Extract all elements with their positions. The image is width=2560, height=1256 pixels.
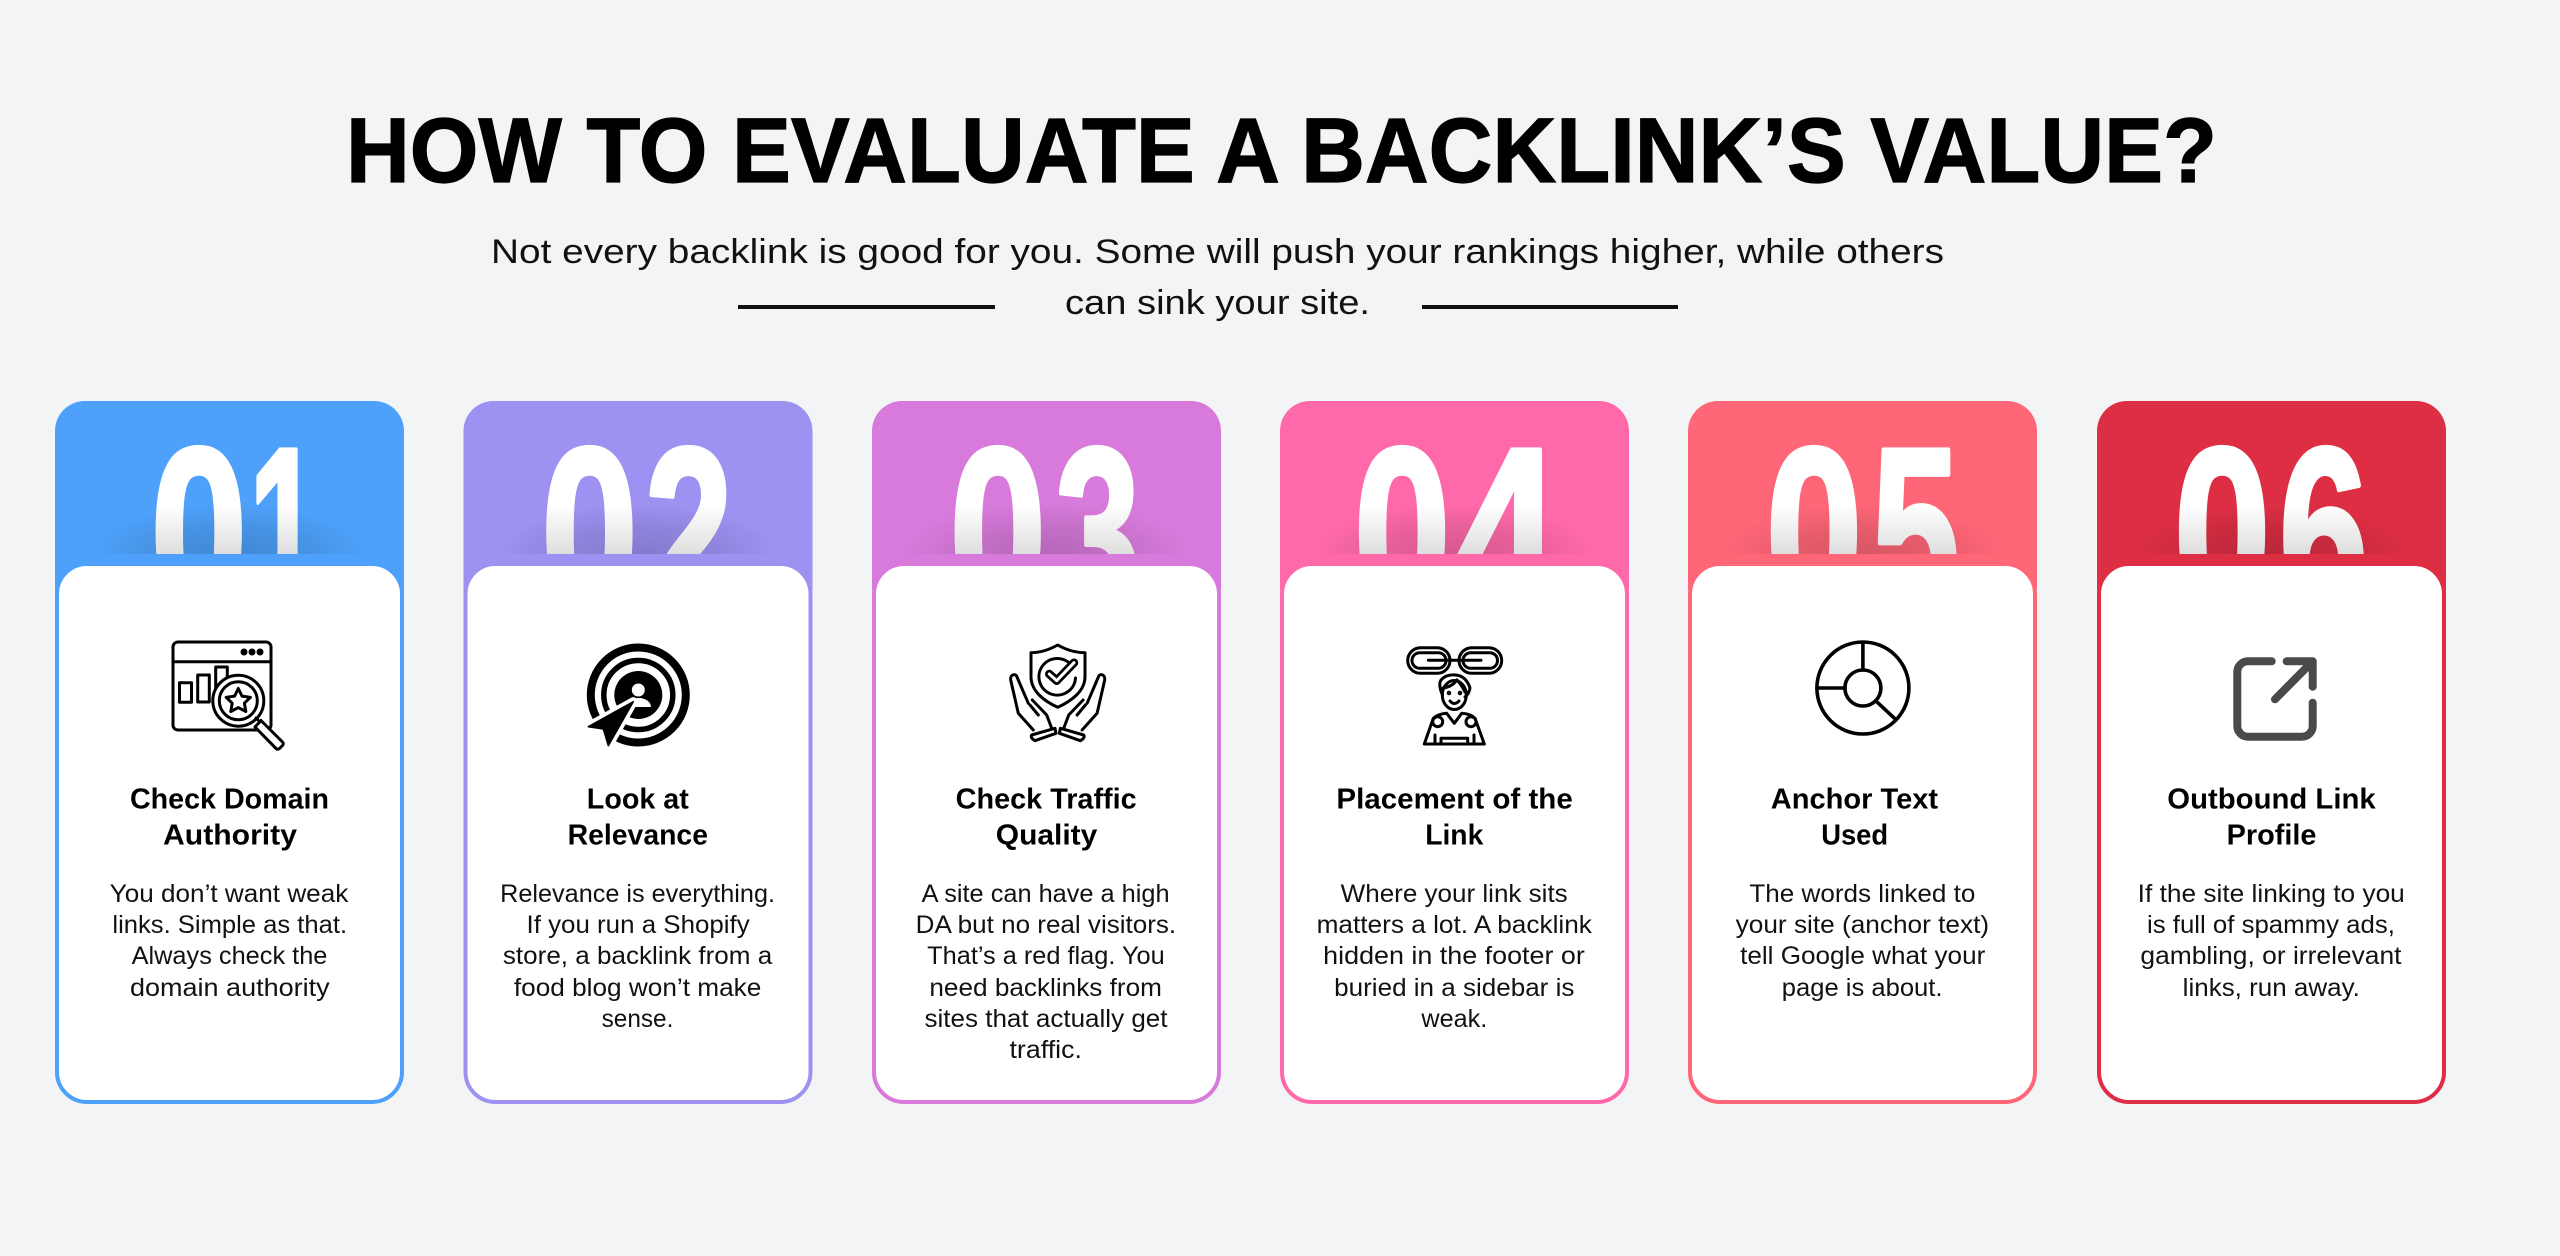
description: sites that actually get [924, 1005, 1168, 1033]
description: is full of spammy ads, [2147, 911, 2395, 939]
description: links. Simple as that. [112, 911, 347, 939]
number 02: 0 [541, 398, 638, 666]
description: Always check the [132, 942, 327, 970]
subtitle with rules: can sink your site. [1065, 284, 1370, 322]
description: hidden in the footer or [1323, 942, 1585, 970]
number 06: 6 [2279, 398, 2368, 666]
description: links, run away. [2183, 974, 2360, 1002]
heading: Look at [587, 783, 689, 815]
description: Where your link sits [1341, 880, 1568, 908]
title: HOW TO EVALUATE A BACKLINK’S VALUE? [346, 100, 2217, 202]
description: tell Google what your [1740, 942, 1985, 970]
description [110, 880, 349, 1002]
number 04: 0 [1354, 398, 1450, 666]
panel: 05 anchor text used [1688, 398, 2037, 1102]
number 05: 0 [1766, 398, 1862, 666]
number 04: 4 [1456, 398, 1558, 666]
description [916, 880, 1176, 1064]
icon: chain and person [1408, 648, 1502, 744]
description: domain authority [130, 974, 330, 1002]
description: If the site linking to you [2138, 880, 2405, 908]
heading: Relevance [568, 820, 708, 852]
description [1317, 880, 1592, 1033]
description: store, a backlink from a [503, 942, 772, 970]
description: You don’t want weak [110, 880, 349, 908]
heading: Placement of the [1336, 783, 1573, 815]
number 03: 0 [950, 398, 1046, 666]
panel: 03 check traffic quality [872, 398, 1221, 1102]
number 03: 3 [1055, 398, 1140, 666]
number 01: 1 [249, 398, 320, 666]
icon: shield and hands [1011, 645, 1105, 741]
number 01: 0 [150, 398, 247, 666]
description: If you run a Shopify [526, 911, 750, 939]
icon: target with cursor [588, 648, 686, 746]
description: That’s a red flag. You [927, 942, 1165, 970]
panel: 02 look at relevance [464, 398, 812, 1102]
description: weak. [1420, 1005, 1487, 1033]
heading [130, 783, 329, 852]
panel: 04 placement of the link [1280, 398, 1629, 1102]
number 06: 0 [2174, 398, 2270, 666]
description: buried in a sidebar is [1334, 974, 1574, 1002]
description [1736, 880, 1989, 1002]
description: The words linked to [1749, 880, 1975, 908]
description: gambling, or irrelevant [2140, 942, 2402, 970]
heading [568, 783, 708, 852]
description: page is about. [1782, 974, 1942, 1002]
number 05: 5 [1871, 398, 1959, 666]
heading: Check Domain [130, 783, 329, 815]
description [500, 880, 775, 1033]
description: Relevance is everything. [500, 880, 775, 908]
heading: Check Traffic [956, 783, 1137, 815]
description: need backlinks from [929, 974, 1162, 1002]
heading: Used [1821, 820, 1888, 852]
description: food blog won’t make [514, 974, 761, 1002]
number 02: 2 [645, 398, 733, 666]
heading: Profile [2227, 820, 2316, 852]
heading [1771, 783, 1939, 852]
description: DA but no real visitors. [916, 911, 1176, 939]
heading: Authority [163, 820, 297, 852]
heading: Link [1425, 820, 1483, 852]
heading [956, 783, 1137, 852]
description [2138, 880, 2405, 1002]
icon: external link [2237, 661, 2313, 737]
heading: Anchor Text [1771, 783, 1939, 815]
description: your site (anchor text) [1736, 911, 1989, 939]
panel: 06 outbound link profile [2097, 398, 2446, 1102]
icon: donut chart [1817, 642, 1909, 734]
panel: 01 check domain authority [55, 398, 404, 1102]
description: sense. [602, 1005, 673, 1033]
description: traffic. [1010, 1036, 1082, 1064]
description: A site can have a high [922, 880, 1170, 908]
heading: Outbound Link [2167, 783, 2376, 815]
icon: browser chart with magnifier [173, 642, 283, 749]
subtitle with rules [491, 233, 1944, 322]
heading [1336, 783, 1573, 852]
description: matters a lot. A backlink [1317, 911, 1592, 939]
heading [2167, 783, 2376, 852]
heading: Quality [996, 820, 1097, 852]
subtitle with rules: Not every backlink is good for you. Some will push your rankings higher, while others [491, 233, 1944, 271]
